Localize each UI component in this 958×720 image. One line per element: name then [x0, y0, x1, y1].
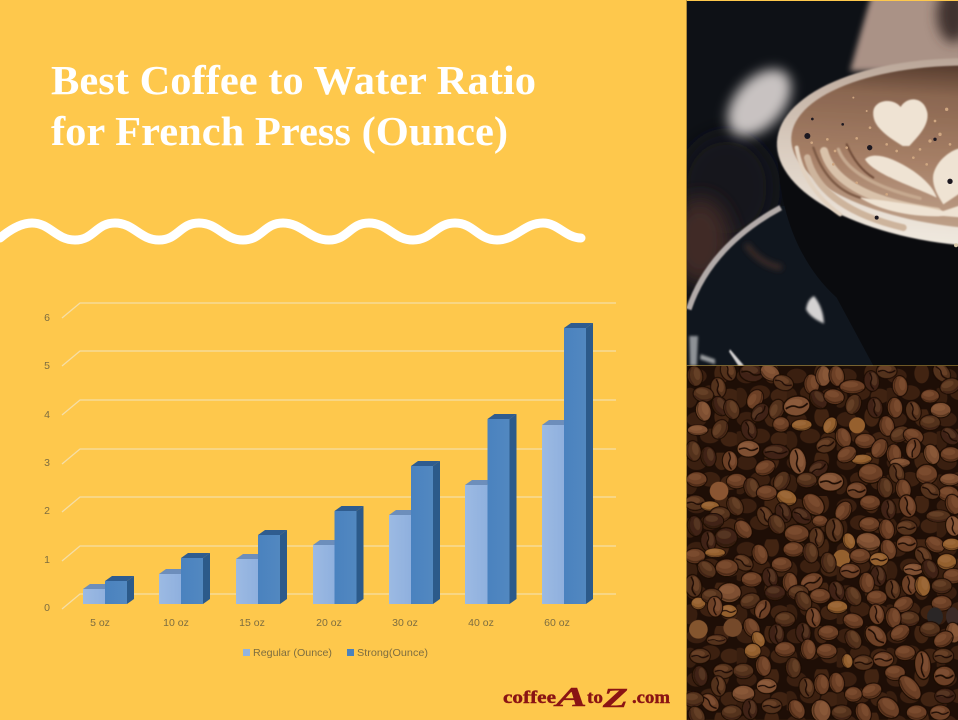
photo: roasted coffee beans [683, 359, 958, 720]
bars: 5 oz [83, 576, 134, 604]
y axis labels: 5 [44, 360, 50, 372]
y axis labels: 1 [44, 554, 50, 566]
chart gridlines [62, 303, 616, 609]
x axis labels: 15 oz [239, 617, 265, 629]
wavy divider [0, 223, 581, 240]
title: for French Press (Ounce) [51, 108, 508, 154]
logo: coffeeAtoZ.com: .com [632, 687, 670, 707]
x axis labels: 5 oz [90, 617, 110, 629]
cup rim [776, 58, 958, 246]
saucer rim [689, 208, 781, 309]
bars: 60 oz [542, 323, 593, 604]
y axis labels: 3 [44, 457, 50, 469]
saucer [687, 201, 958, 366]
y axis labels: 0 [44, 602, 50, 614]
logo: coffeeAtoZ.com: A [553, 682, 587, 712]
x axis labels: 10 oz [163, 617, 189, 629]
latte swirls [797, 144, 937, 228]
y axis labels: 6 [44, 312, 50, 324]
latte art: heart [873, 99, 928, 146]
saucer reflections [689, 244, 949, 366]
legend: Strong(Ounce) [357, 647, 428, 659]
bars: 20 oz [313, 506, 364, 604]
x axis labels: 40 oz [468, 617, 494, 629]
blurred white reflection [718, 60, 800, 146]
bars: 15 oz [236, 530, 287, 604]
title: Best Coffee to Water Ratio [51, 57, 536, 103]
bars: 40 oz [465, 414, 516, 604]
coffee speckles [810, 97, 951, 196]
glints on the cup [954, 243, 958, 247]
logo: coffeeAtoZ.com: to [587, 687, 603, 707]
x axis labels: 60 oz [544, 617, 570, 629]
y axis labels: 2 [44, 505, 50, 517]
left edge strip of latte photo [686, 0, 687, 366]
cup body [777, 151, 958, 366]
bars: 30 oz [389, 461, 440, 604]
legend: Regular (Ounce) [253, 647, 332, 659]
title [51, 57, 536, 154]
blurred background shape [850, 0, 958, 71]
y axis labels: 4 [44, 409, 50, 421]
x axis labels [90, 617, 570, 629]
latte art: leaves [860, 148, 958, 218]
logo: coffeeAtoZ.com [503, 682, 670, 713]
scattered beans [683, 359, 958, 720]
photo: latte in a dark cup [670, 0, 958, 366]
logo: coffeeAtoZ.com: Z [601, 683, 628, 713]
bars: 10 oz [159, 553, 210, 604]
legend [243, 647, 428, 659]
x axis labels: 20 oz [316, 617, 342, 629]
x axis labels: 30 oz [392, 617, 418, 629]
reddish table glow [670, 198, 730, 284]
left edge strip of beans photo [686, 366, 687, 720]
y axis labels [44, 312, 50, 614]
bar chart [44, 303, 616, 659]
coffee surface [790, 64, 958, 228]
logo: coffeeAtoZ.com: coffee [503, 687, 556, 707]
